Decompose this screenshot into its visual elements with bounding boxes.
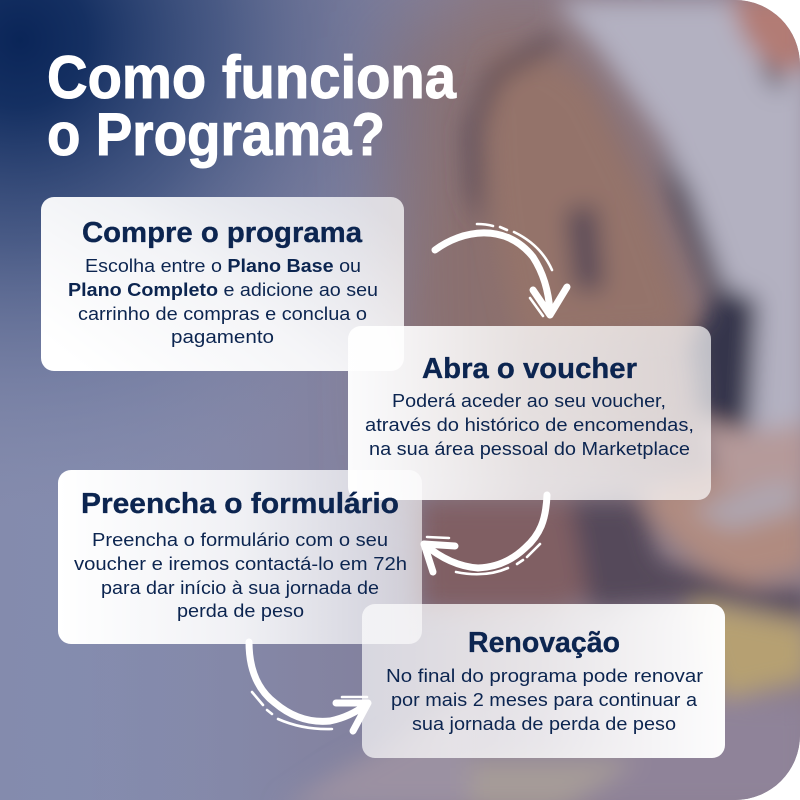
text: Abra o voucher description: na sua área pessoal do Marketplace bbox=[369, 439, 690, 459]
text: Renovação description: sua jornada de perda de peso bbox=[412, 714, 676, 734]
text: Preencha o formulário description: para dar início à sua jornada de bbox=[101, 578, 379, 598]
text: Renovação description: por mais 2 meses para continuar a bbox=[391, 690, 698, 710]
title: o Programa? bbox=[47, 101, 385, 168]
panel: Renovação bbox=[362, 604, 725, 758]
panel: Preencha o formulário bbox=[58, 470, 422, 644]
text: Preencha o formulário description: Preencha o formulário com o seu bbox=[92, 530, 388, 550]
text: Preencha o formulário description: voucher e iremos contactá-lo em 72h bbox=[74, 554, 407, 574]
text: Preencha o formulário description bbox=[74, 530, 407, 621]
title bbox=[47, 44, 457, 168]
text: Compre o programa description: carrinho de compras e conclua o bbox=[78, 304, 367, 324]
text: Abra o voucher description bbox=[365, 391, 694, 459]
heading: Abra o voucher: Abra o voucher bbox=[422, 353, 637, 385]
soft skin transition bbox=[364, 0, 708, 424]
text: Compre o programa description: Escolha entre o Plano Base ou bbox=[85, 256, 361, 276]
text: Compre o programa description bbox=[68, 256, 378, 347]
text: Preencha o formulário description: perda de peso bbox=[177, 601, 304, 621]
heading: Compre o programa: Compre o programa bbox=[82, 217, 363, 249]
text: Abra o voucher description: através do histórico de encomendas, bbox=[365, 415, 694, 435]
text: Renovação description: No final do programa pode renovar bbox=[386, 666, 703, 686]
text: Abra o voucher description: Poderá aceder ao seu voucher, bbox=[392, 391, 666, 411]
arrow: step 2 to step 3 bbox=[424, 495, 547, 574]
text: Renovação description bbox=[386, 666, 703, 734]
text: Compre o programa description: Plano Completo e adicione ao seu bbox=[68, 280, 378, 300]
title: Como funciona bbox=[47, 44, 457, 111]
heading: Preencha o formulário: Preencha o formulário bbox=[81, 488, 399, 520]
heading: Renovação: Renovação bbox=[468, 627, 620, 659]
arrow: step 1 to step 2 bbox=[435, 224, 567, 316]
arrow: step 3 to step 4 bbox=[249, 642, 368, 731]
panel: Abra o voucher bbox=[348, 326, 711, 500]
text: Compre o programa description: pagamento bbox=[171, 327, 274, 347]
panel: Compre o programa bbox=[41, 197, 404, 371]
